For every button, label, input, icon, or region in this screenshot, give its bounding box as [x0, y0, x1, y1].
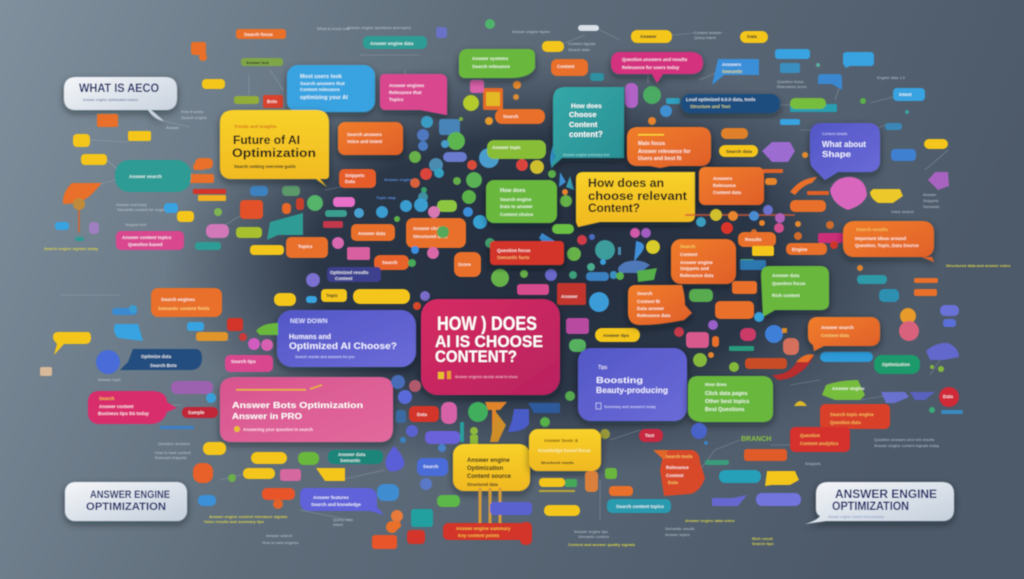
panel: teal how does AI choose: How does: [571, 103, 602, 110]
small text labels: Snippet text: [125, 222, 147, 227]
panel: future of AI optimization: Optimization: [232, 148, 316, 160]
panel: bottom left answer engine optimization: ANSWER ENGINE: [90, 489, 170, 501]
small bubbles: middle left: Topic map: [376, 195, 396, 200]
panel: teal how does AI choose: Content: [569, 120, 598, 129]
panel: green below orange: [761, 266, 829, 317]
small bubbles: bottom center: Search tools: [665, 454, 693, 459]
panel: green left of yellow: Data to answer: [500, 204, 533, 209]
panel: bottom right answer engine optimization: ANSWER ENGINE: [835, 489, 937, 501]
panel: orange search bubble lower right: Content data: [821, 333, 850, 338]
small bubbles: central band: Answer tips: [603, 333, 629, 338]
panel: yellow how does AI choose content: [576, 172, 695, 227]
small text labels: Search tips: [752, 541, 774, 546]
panel: purple how AI chooses: Optimized AI Choose?: [289, 341, 397, 351]
panel: orange how AI answers: [627, 127, 711, 168]
panel: orange tall middle: Content: [680, 252, 698, 257]
small bubbles: top right: Intent: [899, 92, 912, 97]
small bubbles: top right: Semantic: [722, 69, 743, 74]
connector lines: [60, 28, 950, 520]
small bubbles: bottom center: Data: [668, 480, 678, 485]
small bubbles: right middle: Results: [745, 237, 762, 242]
panel: green left of yellow: [486, 180, 557, 223]
small text labels: Search data: [568, 47, 590, 52]
panel: green left of yellow: Content choice: [500, 212, 534, 217]
small bubbles: central band: [274, 281, 959, 380]
panel: purple boosting: [578, 348, 687, 421]
small bubbles: bottom center: Key content points: [458, 533, 500, 538]
panel: future of AI optimization: Trends and insights: [234, 124, 277, 129]
panel: pink top: Topics: [389, 97, 404, 102]
small bubbles: top right: Content: [557, 64, 575, 69]
panel: blue top: Search answers that: [300, 81, 345, 86]
panel: yellow how does AI choose content: choose relevant: [588, 191, 687, 203]
panel: what is AEO callout: [64, 77, 177, 121]
small bubbles: left lower: Answer content: [99, 404, 134, 409]
panel: top green bubble: Answer systems: [472, 56, 509, 61]
panel: red left of orange: Semantic facts: [497, 255, 530, 260]
small bubbles: top left: Search focus: [244, 32, 273, 37]
small text labels: Answer engine questions and topics: [347, 25, 411, 30]
panel: purple what about shape: Content details: [822, 132, 847, 136]
small text labels: Content and answer quality signals: [568, 542, 636, 547]
panel: orange search bubble lower right: [808, 317, 880, 351]
small bubbles: middle left: Snippets: [345, 173, 365, 178]
panel: future of AI optimization: [220, 110, 329, 187]
panel: teal how does AI choose: content?: [569, 130, 603, 139]
small bubbles: bottom center: Relevance: [666, 465, 689, 470]
panel: orange right large: Question, Topic, Data Source: [855, 243, 919, 248]
small bubbles: left lower: Optimize data: [141, 354, 172, 359]
small bubbles: top left: Question based: [128, 242, 163, 247]
small text labels: Snippets: [923, 198, 939, 203]
small bubbles: left lower: Search tips: [231, 359, 256, 364]
panel: green and teal bar: [790, 98, 837, 112]
panel: pink callout top: Relevance for users today: [622, 65, 680, 70]
panel: yellow answer engine left: Content source: [467, 474, 512, 480]
small bubbles: middle left: Answer data: [358, 231, 386, 236]
small bubbles: left lower: [40, 288, 404, 483]
panel: purple boosting: Boosting: [596, 376, 643, 385]
small bubbles: bottom center: Search: [423, 464, 439, 469]
panel: pink answer engine optimization: Answering your question in search: [243, 427, 313, 432]
panel: orange how AI answers: Main focus: [638, 141, 665, 147]
small text labels: Answer engine data notes: [685, 518, 735, 523]
small bubbles: left lower: Sample: [188, 410, 205, 415]
small text labels: Semantic content for engines: [117, 207, 169, 212]
small bubbles: right lower: Data: [943, 394, 953, 399]
panel: purple what about shape: [810, 123, 880, 180]
panel: purple how AI chooses: Humans and: [289, 334, 331, 341]
panel: orange right large: Important ideas around: [855, 236, 906, 241]
panel: yellow answer engine right: Structured results: [541, 461, 574, 465]
small bubbles: top left: Answer text: [246, 60, 269, 65]
panel: orange tall middle: Relevance data: [680, 273, 714, 278]
panel: red left of orange: [490, 241, 564, 265]
panel: future of AI optimization: Future of AI: [233, 135, 300, 147]
small bubbles: top left: [55, 19, 495, 258]
small text labels: Answer engine content relevance signals: [209, 514, 288, 519]
panel: orange right of yellow: [699, 167, 764, 205]
panel: bottom right answer engine optimization: Answer engine content and summary: [828, 515, 884, 519]
panel: yellow answer engine left: Structured data: [467, 482, 499, 487]
small bubbles: middle left: Search: [382, 260, 398, 265]
small bubbles: left lower: Search engines: [161, 297, 195, 302]
small bubbles: center lower dots: Data: [417, 412, 427, 417]
panel: yellow answer engine right: Knowledge based focus: [538, 448, 591, 453]
panel: orange tall middle: Search: [680, 244, 696, 249]
panel: orange tall lower: Relevance data: [637, 313, 671, 318]
panel: top green bubble: [459, 49, 535, 78]
panel: purple how AI chooses: [277, 310, 416, 367]
panel: orange right of yellow: Answers: [713, 176, 733, 181]
panel: purple what about shape: What about: [822, 140, 866, 149]
small text labels: What to know now: [317, 26, 350, 31]
small text labels: Question answers: [158, 441, 190, 446]
small text labels: Answer: [166, 125, 180, 130]
small text labels: Content signals: [568, 41, 596, 46]
small bubbles: right middle: Search data: [726, 149, 752, 154]
small bubbles: left lower: Search: [99, 396, 115, 401]
small text labels: Rich result: [752, 536, 773, 541]
small bubbles: right lower: Content analytics: [800, 441, 839, 446]
small text labels: How to rank content: [155, 450, 191, 455]
small bubbles: top left: Bots: [267, 99, 278, 104]
panel: orange tall middle: Snippets and: [680, 266, 709, 271]
panel: top green bubble: Search relevance: [472, 64, 510, 69]
small text labels: Answer topic: [98, 377, 121, 382]
panel: teal pill: Answer search: [129, 174, 162, 179]
small text labels: Question focus: [777, 79, 804, 84]
panel: orange right large: [843, 221, 934, 262]
small bubbles: middle left: Answer choice: [413, 226, 446, 231]
small text labels: Question answers and rich results: [874, 437, 934, 442]
small bubbles: middle left: Optimized results: [330, 270, 369, 275]
panel: future of AI optimization: Search ranking overview guide: [234, 164, 296, 169]
small text labels: Answer engine content signals today: [874, 443, 939, 448]
small bubbles: middle left: Answer engine: [384, 177, 413, 182]
small bubbles: right lower: Question: [800, 433, 820, 438]
small text labels: Relevance score: [777, 84, 808, 89]
panel: green how does: [688, 376, 773, 422]
panel: orange tall lower: [628, 285, 692, 325]
panel: purple what about shape: Shape: [822, 150, 852, 159]
panel: bottom left answer engine optimization: [65, 482, 187, 521]
panel: purple boosting: Beauty-producing: [596, 386, 668, 395]
panel: pink top: [380, 74, 447, 115]
panel: green how does: Click data pages: [705, 391, 748, 397]
panel: central how does AI choose content: CONTENT?: [435, 347, 517, 366]
small bubbles: top right: Answer: [640, 34, 657, 39]
panel: green how does: How does: [705, 382, 727, 387]
panel: orange tall middle: Answer engine: [680, 260, 713, 265]
panel: pink answer engine optimization: Answer in PRO: [232, 411, 302, 421]
small bubbles: left lower: Semantic content fields: [158, 306, 210, 311]
small bubbles: right lower: [790, 365, 963, 452]
panel: yellow answer engine right: [529, 429, 601, 471]
small text labels: Answer topics: [665, 532, 690, 537]
panel: green how does: Other best topics: [705, 399, 749, 405]
panel: bottom right answer engine optimization: OPTIMIZATION: [832, 501, 909, 513]
small bubbles: center lower dots: [391, 375, 708, 452]
small bubbles: top left: Answer content topics: [122, 235, 172, 240]
panel: teal pill: [115, 159, 213, 192]
small bubbles: central band: Optimization: [882, 362, 910, 367]
small text labels: Answer summary: [116, 202, 147, 207]
small text labels: Answer engine tips: [574, 529, 608, 534]
small text labels: Snippets: [805, 461, 821, 466]
small text labels: Context answer: [694, 30, 722, 35]
small text labels: BRANCH: [741, 436, 771, 443]
panel: pink callout top: Question answers and results: [622, 57, 688, 62]
panel: pink answer engine optimization: [220, 377, 393, 442]
small bubbles: middle left: [282, 169, 481, 287]
panel: yellow answer engine right: Answer basic &: [544, 438, 579, 443]
panel: pink top: Answer engines: [389, 83, 425, 88]
panel: orange tall lower: Search: [637, 291, 653, 296]
panel: purple boosting: Summary and answers today: [604, 404, 656, 409]
small text labels: Search engine signals today: [44, 246, 99, 251]
panel: pink answer engine optimization: Answer Bots Optimization: [232, 400, 363, 410]
panel: blue top: optimizing your AI: [300, 95, 348, 101]
panel: yellow answer engine left: Answer engine: [467, 458, 510, 464]
panel: red left of orange: Question focus: [497, 248, 531, 253]
panel: yellow how does AI choose content: Content?: [588, 203, 640, 215]
small bubbles: right middle: [487, 109, 949, 284]
panel: teal how does AI choose: Answer engine summary text: [563, 153, 609, 157]
panel: pink callout top: [611, 52, 703, 83]
dot cluster: central bubbles: [354, 80, 680, 287]
panel: orange right of yellow: Relevance: [713, 183, 736, 188]
panel: orange right of yellow: Content data: [713, 190, 742, 195]
panel: purple boosting: Tips: [598, 365, 608, 371]
panel: purple how AI chooses: Search results and answers for you: [295, 355, 355, 359]
small bubbles: center lower dots: Text: [645, 433, 655, 438]
small bubbles: right middle: Engine: [792, 247, 808, 252]
panel: green how does: Best Questions: [705, 407, 745, 413]
panel: blue top: Most users look: [300, 74, 343, 80]
small text labels: How to rank engines: [262, 540, 298, 545]
small text labels: How it works: [181, 109, 204, 114]
small text labels: Query intent: [694, 35, 717, 40]
panel: orange right large: Search results: [856, 227, 888, 232]
panel: green left of yellow: Search engine: [500, 197, 532, 202]
small text labels: Semantic results: [665, 526, 695, 531]
small text labels: Semantic content: [578, 534, 610, 539]
small bubbles: middle left: Score: [458, 262, 471, 267]
small text labels: Relevant snippets: [155, 455, 187, 460]
small text labels: Intent: [333, 522, 344, 527]
small bubbles: bottom center: Search and knowledge: [311, 502, 361, 507]
small bubbles: top right: Answers: [722, 62, 742, 67]
small bubbles: top left: Topics: [298, 244, 313, 249]
small text labels: Semantic: [923, 204, 940, 209]
panel: central how does AI choose content: AI IS CHOOSE: [435, 332, 543, 351]
small text labels: Engine data 1.0: [877, 75, 906, 80]
panel: green left of yellow: How does: [500, 188, 525, 194]
panel: orange search bubble lower right: Answer search: [821, 325, 854, 330]
small bubbles: right lower: Answer engine: [832, 386, 865, 391]
small bubbles: bottom center: Answer features: [313, 495, 349, 500]
panel: central how does AI choose content: [421, 299, 560, 395]
panel: yellow how does AI choose content: How does an: [588, 178, 664, 190]
small text labels: Voice search: [891, 209, 914, 214]
small bubbles: left lower: Search Bots: [150, 363, 177, 368]
small bubbles: top right: [542, 25, 948, 161]
panel: teal how does AI choose: Choose: [569, 110, 597, 119]
panel: navy pill: Load optimized 6.0.0 data, tools: [686, 97, 756, 102]
panel: pink top: Relevance that: [389, 90, 422, 95]
panel: blue top: [287, 65, 375, 112]
small bubbles: left lower: Semantic: [340, 458, 361, 463]
small bubbles: right lower: Question data: [830, 420, 861, 425]
panel: orange beside yellow: Search answers: [347, 132, 382, 137]
small bubbles: bottom center: Content: [666, 473, 684, 478]
panel: bottom right answer engine optimization: [805, 482, 954, 524]
small text labels: Search engine: [181, 115, 208, 120]
panel: orange beside yellow: [338, 122, 403, 155]
small bubbles: left lower: Business tips 5G today: [98, 411, 149, 416]
panel: orange tall lower: Data answer: [637, 306, 664, 311]
panel: orange how AI answers: Users and best fit: [638, 156, 682, 162]
small bubbles: bottom center: Answer engine summary: [456, 526, 511, 531]
small bubbles: middle left: Data: [345, 179, 355, 184]
panel: bottom left answer engine optimization: OPTIMIZATION: [86, 501, 166, 513]
small bubbles: bottom center: Search content topics: [616, 504, 664, 509]
small bubbles: left lower: Answer data: [338, 452, 366, 457]
panel: orange beside yellow: Voice and intent: [347, 139, 383, 144]
panel: blue top: Content relevance: [300, 87, 340, 92]
small text labels: Answer: [923, 192, 937, 197]
panel: green below orange: Question focus: [772, 281, 806, 286]
small bubbles: top left: Answer engine data: [370, 41, 414, 46]
small text labels: Voice results and summary tips: [204, 519, 265, 524]
panel: central how does AI choose content: Answer engines decide what to show: [455, 375, 518, 379]
panel: orange how AI answers: Answer relevance for: [638, 149, 690, 155]
panel: yellow answer engine left: [453, 444, 530, 491]
small bubbles: central band: Topic: [326, 293, 338, 298]
panel: navy pill: [681, 94, 780, 113]
small bubbles: right lower: Search topic engine: [830, 412, 874, 417]
panel: navy pill: Structure and Test: [690, 104, 731, 109]
small bubbles: top right: Data: [747, 34, 757, 39]
small text labels: Query data: [333, 517, 354, 522]
panel: orange tall lower: Content fit: [637, 299, 660, 304]
small bubbles: central band: Answer: [561, 294, 578, 299]
small bubbles: right middle: Search: [503, 114, 519, 119]
panel: orange tall middle: [671, 239, 736, 284]
panel: yellow answer engine left: Optimization: [467, 466, 504, 472]
small text labels: Structured data and answer notes: [946, 263, 1011, 268]
small bubbles: middle left: Content: [335, 276, 353, 281]
panel: what is AEO callout: WHAT IS AECO: [79, 81, 159, 95]
small bubbles: bottom center: [198, 449, 801, 549]
panel: teal how does AI choose: [551, 87, 624, 168]
small bubbles: right middle: Answer topic: [492, 145, 521, 150]
panel: purple how AI chooses: NEW DOWN: [290, 318, 328, 325]
small text labels: Answer search: [266, 533, 292, 538]
panel: green below orange: Rich content: [772, 293, 800, 298]
small bubbles: middle left: Structured data: [413, 234, 447, 239]
panel: what is AEO callout: Answer engine optimization basics: [83, 98, 138, 102]
small text labels: Answer engine topics: [512, 29, 550, 34]
panel: green below orange: Answer data: [772, 273, 800, 278]
panel: central how does AI choose content: HOW ) DOES: [437, 314, 537, 335]
